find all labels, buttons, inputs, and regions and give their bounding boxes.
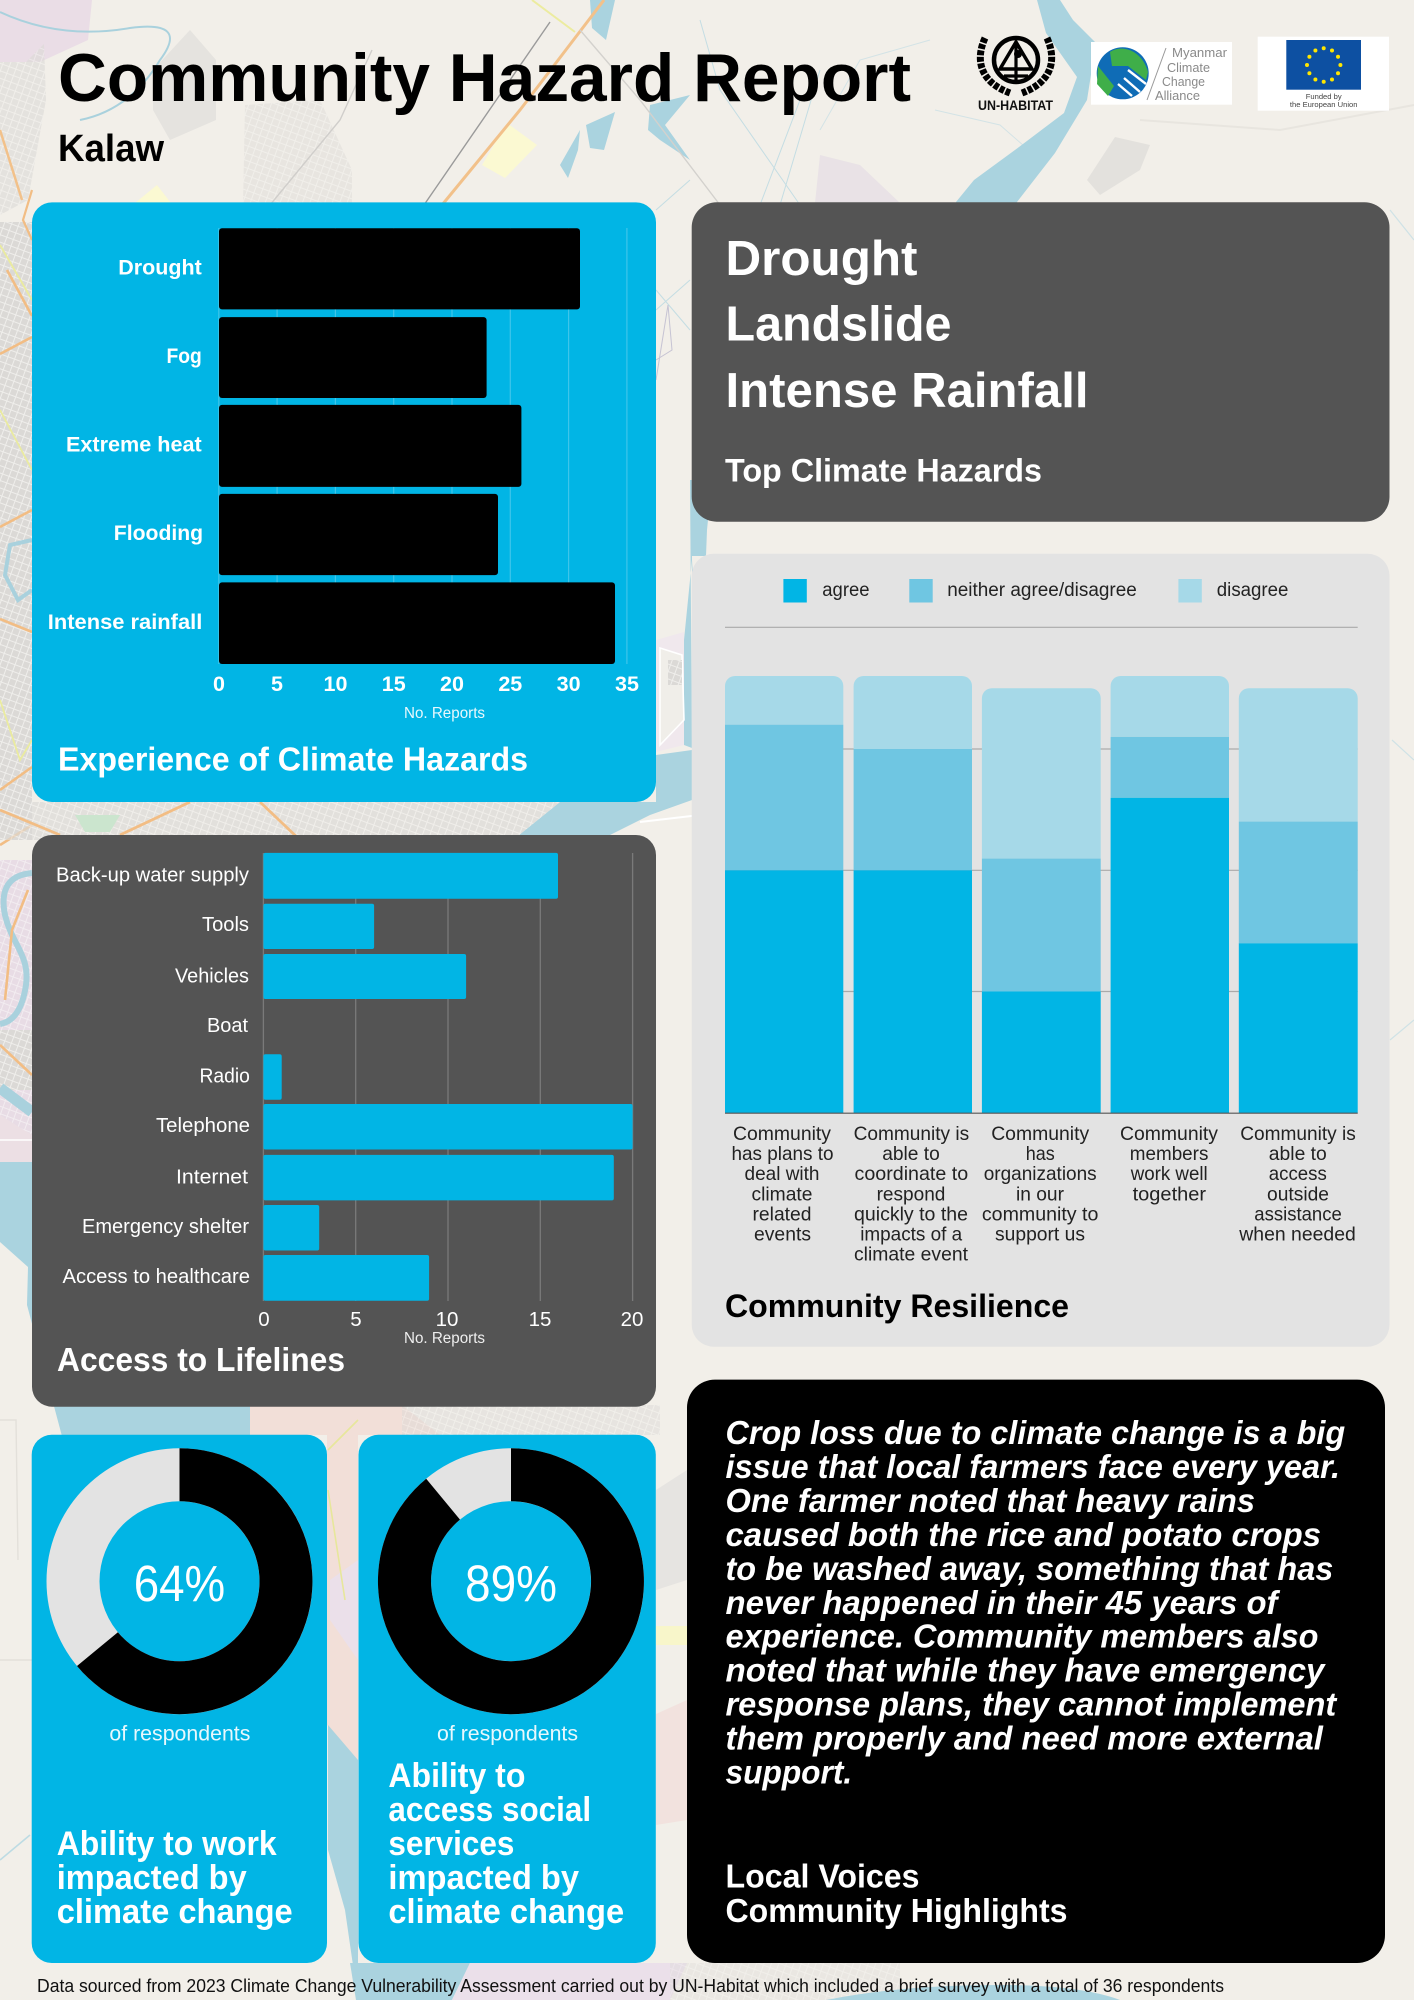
statement labels: climate event [854, 1244, 969, 1266]
panel heading [388, 1757, 624, 1931]
statement labels: events [754, 1224, 811, 1246]
panel heading: Community Resilience [725, 1288, 1069, 1324]
footer source note: Data sourced from 2023 Climate Change Vulnerability Assessment carried out by UN-Habitat which included a brief survey with a total of 36 respondents [37, 1976, 1224, 1996]
x axis values: 0 [258, 1308, 270, 1331]
panel heading: Local Voices [726, 1858, 920, 1895]
axis title: No. Reports [404, 1330, 485, 1347]
panel heading: impacted by [388, 1859, 579, 1897]
statement labels: Community is [1240, 1123, 1356, 1145]
panel: local voices [687, 1380, 1385, 1963]
bar chart: lifelines [263, 853, 633, 1301]
lifeline labels: Internet [176, 1166, 248, 1188]
panel: access to lifelines [32, 835, 656, 1407]
panel: experience of climate hazards [32, 202, 656, 802]
panel: ability to work [32, 1435, 327, 1963]
statement labels: related [752, 1203, 812, 1225]
axis title: No. Reports [404, 705, 485, 722]
hazard labels: Intense rainfall [48, 610, 202, 634]
hazard labels: Extreme heat [66, 432, 202, 456]
hazard labels: Drought [118, 256, 202, 280]
statement labels: coordinate to [854, 1163, 968, 1185]
quote: support. [726, 1754, 852, 1792]
statement labels: respond [877, 1183, 945, 1205]
statement labels: Community [733, 1123, 831, 1145]
x axis values: 10 [324, 672, 347, 696]
x axis values: 15 [529, 1308, 551, 1331]
lifeline labels [56, 864, 250, 1288]
hazard labels [48, 256, 203, 634]
quote: never happened in their 45 years of [726, 1585, 1280, 1622]
statement labels: outside [1267, 1183, 1329, 1205]
x axis values: 20 [440, 672, 464, 696]
statement labels: has [1026, 1143, 1055, 1165]
logo: UN-Habitat [978, 38, 1054, 113]
x axis values: 5 [350, 1308, 362, 1331]
panel heading: climate change [57, 1893, 293, 1931]
lifeline labels: Emergency shelter [82, 1216, 249, 1238]
quote: experience. Community members also [726, 1619, 1318, 1656]
statement labels: climate [752, 1183, 812, 1205]
panel heading: Access to Lifelines [57, 1341, 345, 1378]
statement labels: assistance [1254, 1203, 1342, 1225]
x axis values [258, 1308, 643, 1331]
panel heading: impacted by [57, 1859, 247, 1897]
x axis values: 10 [436, 1308, 458, 1331]
subtitle: location: Kalaw [58, 128, 164, 170]
panel heading: access social [388, 1791, 591, 1829]
water body, south-west [0, 1162, 250, 1440]
hazard labels: Fog [166, 344, 202, 368]
logo: Myanmar Climate Change Alliance: Climate [1167, 61, 1210, 75]
quote: caused both the rice and potato crops [726, 1517, 1321, 1554]
stacked bar chart [725, 676, 1358, 1113]
lifeline labels: Vehicles [175, 966, 249, 988]
statement labels: has plans to [732, 1143, 834, 1165]
caption: of respondents [109, 1723, 250, 1746]
statement labels: Community [1120, 1123, 1218, 1145]
panel heading: Experience of Climate Hazards [58, 741, 528, 778]
legend: neither agree/disagree [947, 580, 1137, 601]
lifeline labels: Telephone [156, 1115, 250, 1137]
donut chart: 89%: 89% [465, 1555, 557, 1612]
panel heading [726, 1858, 1068, 1929]
left side urban strip [0, 222, 32, 840]
logo: Myanmar Climate Change Alliance [1091, 42, 1232, 105]
x axis values: 35 [615, 672, 639, 696]
statement labels: Community [991, 1123, 1089, 1145]
lifeline labels: Boat [207, 1015, 248, 1037]
bar chart: hazards [219, 228, 615, 664]
legend [783, 579, 1288, 602]
x axis values: 20 [621, 1308, 643, 1331]
statement labels [732, 1123, 1356, 1266]
logo: Myanmar Climate Change Alliance: Change [1162, 75, 1205, 89]
donut chart: 64% [73, 1448, 312, 1714]
lower map: pink and grey districts [250, 1405, 440, 1760]
title: Community Hazard Report [58, 40, 911, 116]
panel heading: Top Climate Hazards [725, 453, 1042, 489]
donut chart: 89% [378, 1448, 644, 1714]
logo: Myanmar Climate Change Alliance: Myanmar [1172, 46, 1227, 60]
x axis values: 15 [382, 672, 406, 696]
logo: EU funding [1258, 37, 1389, 111]
lifeline labels: Radio [200, 1065, 250, 1087]
panel heading: Ability to work [57, 1825, 277, 1863]
logo: EU funding: the European Union [1290, 100, 1357, 109]
quote [726, 1415, 1345, 1792]
x axis values: 0 [213, 672, 225, 696]
statement labels: organizations [984, 1163, 1097, 1185]
panel heading: services [388, 1825, 514, 1863]
logo: Myanmar Climate Change Alliance: Alliance [1155, 89, 1200, 103]
panel: ability to access social services [358, 1435, 656, 1963]
statement labels: community to [982, 1203, 1099, 1225]
top hazards list: Intense Rainfall [726, 364, 1088, 418]
quote: them properly and need more external [726, 1721, 1324, 1758]
statement labels: when needed [1238, 1224, 1356, 1246]
lifeline labels: Access to healthcare [62, 1266, 250, 1288]
quote: issue that local farmers face every year. [726, 1449, 1340, 1486]
statement labels: in our [1016, 1183, 1064, 1205]
quote: to be washed away, something that has [726, 1551, 1333, 1588]
legend: disagree [1217, 580, 1288, 601]
statement labels: able to [1269, 1143, 1327, 1165]
hazard labels: Flooding [114, 521, 203, 545]
caption: of respondents [437, 1723, 578, 1746]
quote: Crop loss due to climate change is a big [726, 1415, 1345, 1452]
statement labels: Community is [854, 1123, 969, 1145]
logo: UN-Habitat: UN-HABITAT [978, 98, 1054, 113]
quote: One farmer noted that heavy rains [726, 1483, 1255, 1520]
panel: community resilience [692, 554, 1390, 1347]
quote: response plans, they cannot implement [726, 1687, 1338, 1724]
statement labels: able to [882, 1143, 940, 1165]
top hazards list: Landslide [726, 298, 952, 352]
statement labels: work well [1130, 1163, 1208, 1185]
x axis values [213, 672, 639, 696]
x axis values: 25 [498, 672, 522, 696]
gap row between blue and grey panels [0, 802, 560, 840]
panel heading [57, 1825, 293, 1931]
x axis values: 30 [557, 672, 581, 696]
river, north-east [956, 0, 1096, 212]
statement labels: access [1269, 1163, 1327, 1185]
river, central channel [513, 480, 712, 840]
top hazards list [726, 232, 1088, 418]
legend: agree [822, 580, 870, 601]
statement labels: quickly to the [854, 1203, 968, 1225]
donut chart: 64%: 64% [134, 1555, 225, 1612]
statement labels: impacts of a [860, 1224, 962, 1246]
logo: EU funding: Funded by [1306, 92, 1342, 101]
panel heading: climate change [388, 1893, 624, 1931]
quote: noted that while they have emergency [726, 1653, 1327, 1690]
statement labels: support us [995, 1224, 1085, 1246]
statement labels: members [1130, 1143, 1209, 1165]
top hazards list: Drought [726, 232, 918, 286]
panel heading: Community Highlights [726, 1892, 1068, 1929]
panel heading: Ability to [388, 1757, 525, 1795]
lifeline labels: Back-up water supply [56, 864, 249, 886]
statement labels: deal with [744, 1163, 820, 1185]
statement labels: together [1133, 1183, 1207, 1205]
x axis values: 5 [271, 672, 283, 696]
panel: top climate hazards [692, 202, 1390, 522]
lifeline labels: Tools [202, 914, 249, 936]
